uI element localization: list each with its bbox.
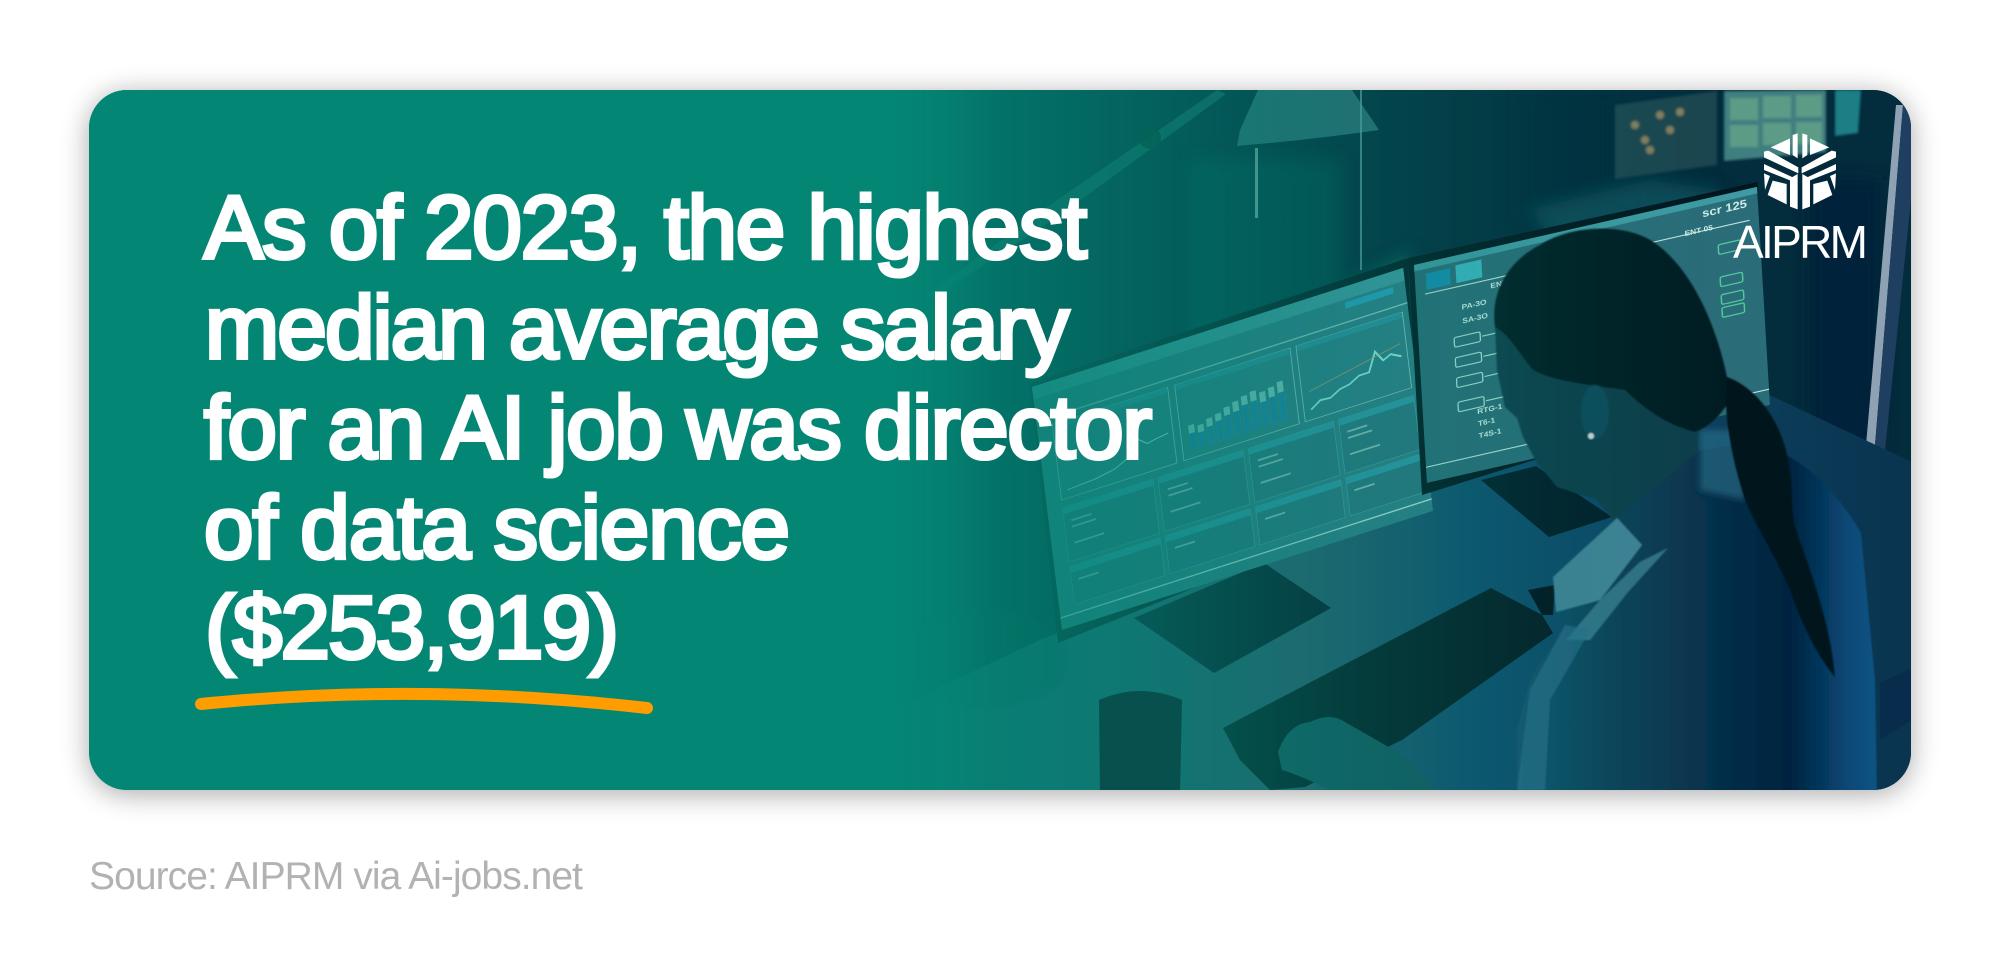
screen labels: PA-3O bbox=[1461, 298, 1487, 312]
woman bbox=[1494, 229, 1877, 800]
neck and face bbox=[1495, 327, 1700, 525]
headline: As of 2023, the highest bbox=[204, 177, 1087, 277]
desk bbox=[972, 395, 1911, 790]
collar fold bbox=[1566, 548, 1668, 640]
screen labels bbox=[1459, 197, 1757, 442]
card shadow bbox=[89, 94, 1911, 794]
screen labels: T6-1 bbox=[1478, 416, 1496, 428]
photo: office scene bbox=[880, 90, 1920, 800]
line charts bbox=[1064, 430, 1171, 490]
logo wordmark: AIPRM bbox=[1733, 216, 1868, 268]
photo fade overlay bbox=[89, 90, 1660, 790]
ear bbox=[1581, 385, 1609, 439]
panel: green photo card bbox=[89, 90, 1920, 800]
background: blurred room shapes bbox=[1198, 164, 1879, 440]
orange underline bbox=[201, 694, 647, 708]
collar bbox=[1553, 518, 1642, 612]
headline: ($253,919) bbox=[205, 577, 619, 677]
right monitor stand bbox=[1481, 466, 1612, 537]
ponytail bbox=[1726, 377, 1835, 677]
shirt bbox=[1517, 440, 1877, 800]
bars bbox=[1186, 380, 1287, 450]
keyboard bbox=[1223, 588, 1553, 790]
round speaker bbox=[900, 612, 1070, 708]
background monitors bbox=[1615, 90, 1861, 179]
screen labels: T4S-1 bbox=[1478, 427, 1502, 440]
left monitor screen bbox=[1032, 268, 1433, 630]
headline: for an AI job was director bbox=[204, 377, 1152, 477]
screen labels: ENT 05 bbox=[1684, 223, 1714, 238]
sleeve highlight bbox=[1517, 625, 1590, 790]
lamp bbox=[984, 90, 1379, 270]
screen labels: SA-3O bbox=[1462, 311, 1488, 325]
shoulder highlight bbox=[1700, 430, 1745, 500]
screen labels: scr 125 bbox=[1702, 197, 1747, 220]
lower panels bbox=[1063, 395, 1426, 604]
logo mark bbox=[1764, 133, 1836, 209]
screen labels: ENT 01 bbox=[1490, 275, 1520, 290]
window post bbox=[1866, 105, 1911, 450]
left monitor bezel bbox=[1030, 258, 1418, 643]
right monitor screen bbox=[1414, 187, 1770, 483]
right monitor bezel bbox=[1408, 182, 1758, 495]
screen labels: RTG-1 bbox=[1477, 402, 1503, 416]
hand bbox=[1278, 717, 1436, 795]
hair bbox=[1494, 229, 1730, 432]
headline bbox=[204, 177, 1152, 677]
coffee mug bbox=[1099, 691, 1182, 795]
chart panels bbox=[1052, 312, 1412, 500]
headline: median average salary bbox=[205, 277, 1070, 377]
source note: Source: AIPRM via Ai-jobs.net bbox=[89, 855, 583, 898]
left monitor stand bbox=[1134, 563, 1331, 673]
AIPRM logo bbox=[1733, 133, 1868, 268]
headline: of data science bbox=[204, 477, 790, 577]
